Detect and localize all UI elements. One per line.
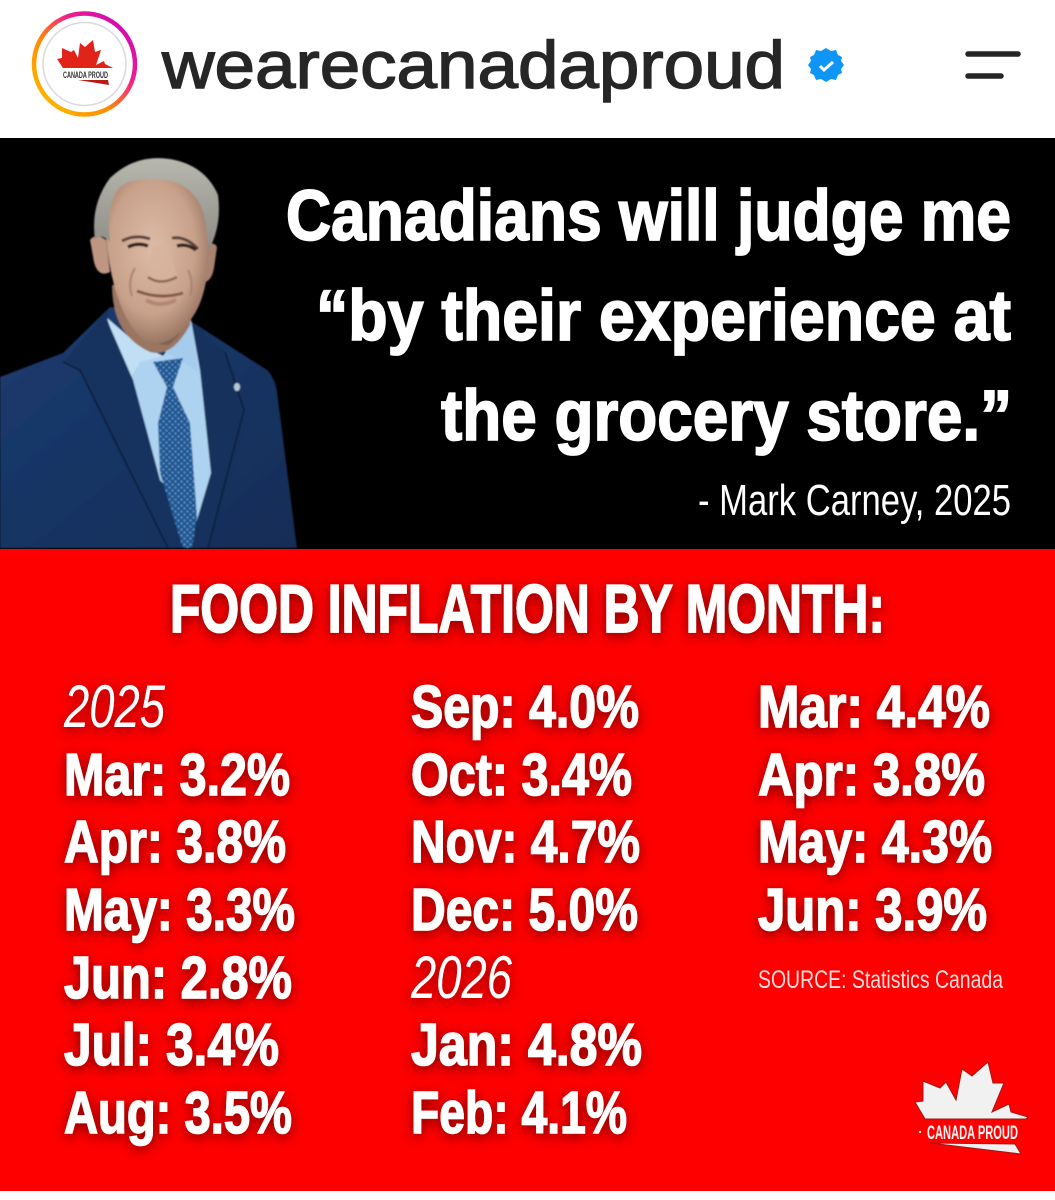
column: 2025 September to 2026 February: Nov: 4.7%	[411, 809, 640, 875]
avatar: Canada Proud logo in story ring: CANADA PROUD	[63, 70, 108, 80]
column: 2025 September to 2026 February: Jan: 4.8%	[411, 1012, 642, 1078]
column: 2025 March to August	[63, 673, 295, 1146]
column: 2025 September to 2026 February: Dec: 5.0%	[411, 877, 638, 943]
column: 2025 September to 2026 February: Feb: 4.1%	[411, 1080, 627, 1146]
column: 2025 March to August: Aug: 3.5%	[64, 1080, 292, 1146]
quote text	[286, 177, 1012, 456]
column: 2025 March to August: 2025	[63, 673, 165, 740]
column: 2025 March to August: Jul: 3.4%	[64, 1012, 279, 1078]
column: March to June: Jun: 3.9%	[758, 877, 987, 943]
logo: Canada Proud	[915, 1062, 1028, 1154]
column: 2025 September to 2026 February	[410, 674, 642, 1146]
column: March to June	[758, 674, 992, 943]
column: 2025 September to 2026 February: 2026	[410, 944, 512, 1011]
column: March to June: May: 4.3%	[758, 809, 992, 875]
column: 2025 March to August: May: 3.3%	[64, 877, 295, 943]
column: March to June: Mar: 4.4%	[758, 674, 990, 740]
username: wearecanadaproud	[161, 28, 785, 103]
icon: menu	[968, 54, 1018, 76]
column: 2025 March to August: Jun: 2.8%	[64, 945, 292, 1011]
column: 2025 September to 2026 February: Oct: 3.4%	[411, 742, 632, 808]
column: 2025 March to August: Apr: 3.8%	[64, 809, 286, 875]
panel: food inflation	[0, 549, 1055, 1191]
portrait of Mark Carney	[0, 158, 297, 548]
column: 2025 September to 2026 February: Sep: 4.0%	[411, 674, 639, 740]
panel: quote	[0, 138, 1055, 549]
icon: verified badge	[808, 48, 844, 82]
profile header bar	[0, 0, 1055, 138]
column: March to June: Apr: 3.8%	[758, 742, 985, 808]
column: 2025 March to August: Mar: 3.2%	[64, 742, 290, 808]
avatar: Canada Proud logo in story ring	[34, 14, 135, 114]
